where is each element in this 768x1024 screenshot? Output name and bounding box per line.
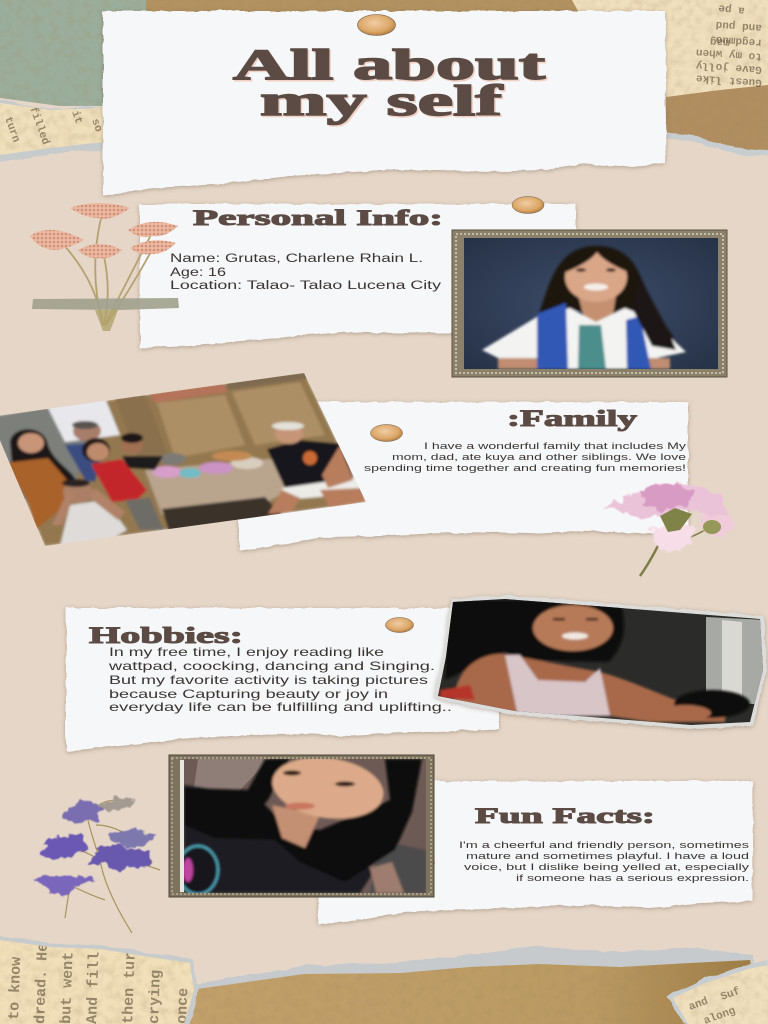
frame <box>452 230 727 377</box>
family text <box>364 441 686 474</box>
boy in black <box>122 440 144 454</box>
title <box>233 42 548 126</box>
title: All about <box>234 44 548 90</box>
man in black <box>267 440 353 488</box>
fun facts text: I'm a cheerful and friendly person, sometimes <box>459 840 749 851</box>
icon: dried peach flowers with tape <box>30 203 179 331</box>
fun facts text: voice, but I dislike being yelled at, especially <box>464 862 749 873</box>
heading: Personal Info: <box>193 205 443 230</box>
photo: graduation portrait in frame <box>452 230 727 377</box>
bottom right newspaper <box>673 965 768 1024</box>
newspaper words right <box>695 1 762 88</box>
collage: top corners <box>0 0 768 163</box>
girl in orange <box>10 429 78 486</box>
hobbies text: In my free time, I enjoy reading like <box>109 645 384 659</box>
old man <box>73 421 101 441</box>
green paper top left <box>0 0 146 106</box>
photo: family group <box>0 372 366 546</box>
boy in front <box>63 481 93 503</box>
family text: mom, dad, ate kuya and other siblings. We love <box>392 452 686 463</box>
heading: Hobbies: <box>89 623 243 648</box>
tan paper right <box>666 70 768 152</box>
hobbies text: everyday life can be fulfilling and uplifting.. <box>109 700 452 714</box>
collage: bottom <box>0 935 768 1024</box>
newspaper left <box>0 103 103 155</box>
bottom right grey edge <box>668 960 768 1024</box>
petals <box>602 484 738 552</box>
portrait <box>464 238 718 369</box>
torn border <box>434 595 767 729</box>
pin <box>386 618 414 632</box>
newspaper words bottom left: crying <box>146 970 165 1024</box>
heading: :Family <box>507 406 638 431</box>
panel: hobbies <box>66 608 499 751</box>
fun facts text <box>459 840 749 884</box>
newspaper top right <box>572 0 768 97</box>
tan paper top <box>140 0 580 14</box>
newspaper words right: mag <box>710 35 730 48</box>
newspaper words bottom right <box>689 986 738 1024</box>
torn paper <box>239 402 688 550</box>
photo: girl with camera, torn edges <box>434 595 768 730</box>
panel: title <box>103 11 666 195</box>
newspaper words right: and pud <box>715 18 762 33</box>
newspaper words left: filled <box>26 105 51 147</box>
petals <box>34 797 157 898</box>
selfie <box>178 750 426 894</box>
title: my self <box>262 80 505 126</box>
hobbies text: But my favorite activity is taking pictures <box>109 673 428 687</box>
torn paper <box>140 204 576 348</box>
family text: spending time together and creating fun memories! <box>364 463 686 474</box>
newspaper words left: turn <box>1 115 22 144</box>
grey torn edge <box>0 100 103 163</box>
info lines: Age: 16 <box>170 267 226 279</box>
newspaper words right: to my when <box>696 45 762 62</box>
newspaper words left: so <box>88 117 104 134</box>
bottom left grey edge <box>0 935 198 1024</box>
frame <box>169 755 434 897</box>
info lines: Name: Grutas, Charlene Rhain L. <box>170 253 423 265</box>
newspaper words right: regdmuo <box>715 33 762 48</box>
panel: fun facts <box>318 781 753 924</box>
info lines <box>170 253 441 292</box>
pin <box>512 196 544 214</box>
icon: pressed purple flower <box>34 797 160 933</box>
newspaper words left: it <box>68 109 84 126</box>
newspaper words bottom left <box>6 943 192 1024</box>
child in red <box>82 438 110 462</box>
tape <box>32 298 179 310</box>
heading: Fun Facts: <box>475 803 655 828</box>
fun facts text: if someone has a serious expression. <box>516 873 749 884</box>
newspaper words bottom left: And fill <box>84 952 104 1024</box>
title: All about <box>233 42 546 89</box>
panel: personal info <box>140 196 576 348</box>
grey edge bottom tan paper <box>185 946 760 1024</box>
newspaper words bottom left: but went <box>58 952 78 1024</box>
pin <box>370 424 402 442</box>
hobbies text <box>107 645 452 714</box>
newspaper words bottom right: and <box>687 996 710 1014</box>
newspaper words bottom left: to know <box>6 957 25 1020</box>
grey edge right <box>666 132 768 156</box>
hobbies text: wattpad, coocking, dancing and Singing. <box>107 659 435 673</box>
photo: selfie in frame <box>169 750 434 897</box>
newspaper words left <box>6 108 102 144</box>
newspaper words right: Gave jolly <box>695 58 762 75</box>
photo content <box>436 595 768 730</box>
newspaper words bottom right: Suf <box>719 986 742 1004</box>
newspaper words right: Guest like <box>695 71 762 88</box>
blossom clusters <box>30 203 178 258</box>
torn paper <box>318 781 753 924</box>
bottom tan paper <box>185 960 762 1024</box>
newspaper words bottom left: once <box>174 988 192 1024</box>
torn paper <box>103 11 666 195</box>
family text: I have a wonderful family that includes My <box>424 441 686 452</box>
panel: family <box>239 402 688 550</box>
newspaper words bottom left: then tur <box>120 952 140 1024</box>
newspaper words bottom left: dread. He <box>32 943 52 1024</box>
fun facts text: mature and sometimes playful. I have a loud <box>466 851 749 862</box>
icon: pink rose <box>602 484 738 576</box>
title: my self <box>260 78 503 125</box>
leaves <box>660 508 692 532</box>
torn paper <box>66 608 499 751</box>
bottom left newspaper <box>0 940 194 1024</box>
hobbies text: because Capturing beauty or joy in <box>109 687 388 701</box>
info lines: Location: Talao- Talao Lucena City <box>170 280 441 292</box>
pin <box>358 14 396 36</box>
newspaper words right: a pe <box>718 1 745 16</box>
table <box>145 458 289 515</box>
